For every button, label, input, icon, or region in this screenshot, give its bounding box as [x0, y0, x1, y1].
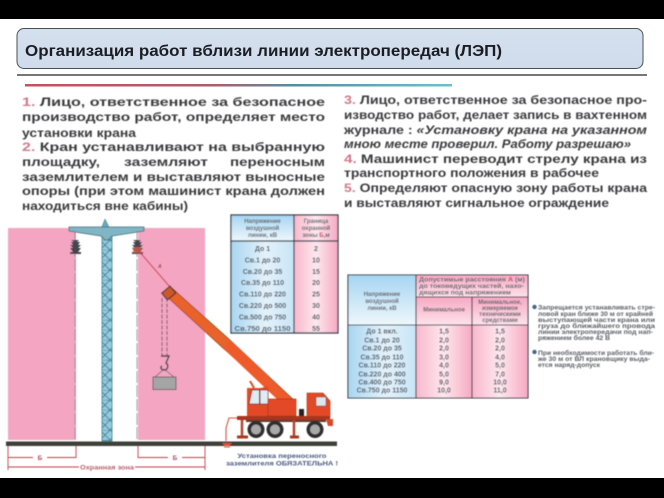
table: protection zone boundaries: Св.35 до 110 — [241, 280, 284, 287]
table: protection zone boundaries: линии, кВ — [248, 233, 278, 239]
title banner — [17, 28, 643, 68]
protection zone: left — [8, 228, 76, 440]
table: permissible distances: До 1 вкл. — [366, 328, 398, 336]
text block: steps 3-5 — [343, 95, 648, 210]
table: permissible distances — [348, 275, 528, 398]
hoist cables and hook — [155, 298, 174, 377]
table: permissible distances: 5,0 — [439, 372, 449, 378]
table: permissible distances: измеряемое — [482, 306, 519, 312]
table: permissible distances: 1,5 — [495, 328, 505, 336]
table: permissible distances: Св.20 до 35 — [362, 346, 402, 352]
protection zone dimension: Охранная зона — [80, 464, 135, 472]
text block: steps 3-5: 3. Лицо, ответственное за безопасное про- — [344, 95, 647, 107]
text block: steps 1-2: находиться вне кабины) — [22, 201, 188, 213]
table: permissible distances: 4,0 — [439, 362, 449, 370]
table: protection zone boundaries: Св.220 до 500 — [239, 303, 286, 310]
bullet note 2 — [532, 349, 654, 369]
text block: steps 1-2: 1. Лицо, ответственное за безопасное — [22, 97, 325, 109]
top black bar — [0, 0, 664, 19]
text block: steps 1-2: переносным — [230, 157, 325, 169]
text block: steps 3-5: транспортного положения в рабочее — [344, 168, 599, 180]
table: protection zone boundaries: 55 — [312, 326, 320, 333]
side notes — [532, 304, 656, 369]
portable grounding conductor — [222, 418, 237, 447]
left conductor — [70, 231, 81, 440]
table: permissible distances: Св.35 до 110 — [360, 354, 404, 362]
text block: steps 3-5: мною месте проверил. Работу разрешаю» — [344, 139, 632, 151]
table: permissible distances: средствами — [482, 318, 518, 324]
bullet note 2: При необходимости работать бли- — [538, 349, 654, 357]
text block: steps 3-5: изводство работ, делает запись в вахтенном — [344, 110, 647, 122]
bullet note 1: Запрещается устанавливать стре- — [538, 304, 655, 312]
bullet note 1: груза до ближайшего провода — [538, 322, 656, 330]
text block: steps 1-2: площадку, — [22, 157, 100, 169]
table: permissible distances: Минимальное, — [478, 300, 522, 306]
text block: steps 1-2: 2. Кран устанавливают на выбранную — [22, 142, 325, 154]
table: permissible distances: Св.1 до 20 — [364, 338, 400, 344]
table: protection zone boundaries: Св.20 до 35 — [243, 269, 282, 276]
table: permissible distances: 10,0 — [493, 380, 507, 386]
bullet note 1 — [532, 304, 656, 342]
gradient rule — [25, 84, 452, 86]
grounding note: заземлителя ОБЯЗАТЕЛЬНА ! — [226, 460, 338, 468]
grounding note — [226, 453, 338, 468]
table: permissible distances: Минимальное — [423, 308, 466, 314]
table: permissible distances: 2,0 — [439, 338, 449, 344]
table: protection zone boundaries — [231, 215, 338, 333]
grounding note: Установка переносного — [238, 453, 327, 460]
ground — [6, 442, 337, 446]
table: permissible distances: 3,0 — [439, 354, 449, 362]
table: permissible distances: воздушной — [365, 298, 399, 305]
table: permissible distances: 10,0 — [437, 388, 451, 394]
table: protection zone boundaries: 30 — [312, 303, 320, 310]
table: permissible distances: 2,0 — [495, 338, 505, 344]
table: protection zone boundaries: 40 — [312, 314, 320, 322]
table: permissible distances: Допустимые расстояния А (м) — [419, 278, 525, 284]
dimension B right — [138, 446, 205, 470]
table: permissible distances: 2,0 — [495, 346, 505, 352]
table: protection zone boundaries: Св.500 до 750 — [239, 314, 286, 322]
bullet note 1: выступающей части крана или — [538, 316, 655, 324]
dimension B left — [8, 446, 76, 470]
wheels — [248, 421, 324, 438]
dimension B left: Б — [38, 455, 43, 462]
crane truck — [237, 381, 333, 438]
table: permissible distances: Св.400 до 750 — [358, 380, 406, 386]
table: protection zone boundaries: Св.110 до 220 — [239, 292, 286, 298]
table: permissible distances: 9,0 — [439, 380, 449, 386]
title underline — [17, 74, 647, 76]
text block: steps 3-5: и выставляют сигнальное ограждение — [344, 198, 609, 210]
dimension B right: Б — [173, 455, 178, 462]
table: protection zone boundaries: Св.1 до 20 — [245, 258, 280, 264]
table: protection zone boundaries: 10 — [312, 258, 320, 264]
bullet note 1: линии электропередачи под нап- — [538, 329, 653, 336]
table: protection zone boundaries: Св.750 до 1150 — [234, 326, 291, 333]
bottom black bar — [0, 478, 664, 498]
text block: steps 1-2: заземлителем и выставляют выносные — [22, 172, 325, 184]
boom — [162, 286, 296, 402]
title banner: Организация работ вблизи линии электропередач (ЛЭП) — [25, 43, 502, 60]
pylon — [69, 219, 144, 441]
distance A line: А — [157, 264, 162, 270]
bullet note 2: ется наряд-допуск — [538, 362, 601, 369]
text block: steps 3-5: журнале : «Установку крана на указанном — [343, 125, 648, 137]
table: permissible distances: 2,0 — [439, 346, 449, 352]
table: permissible distances: техническими — [479, 312, 521, 318]
table: permissible distances: Напряжение — [364, 292, 401, 298]
table: permissible distances: 11,0 — [493, 388, 507, 394]
text block: steps 1-2 — [22, 97, 325, 213]
table: permissible distances: линии, кВ — [367, 306, 397, 312]
table: protection zone boundaries: зоны Б,м — [302, 233, 330, 239]
bullet note 2: же 30 м от ВЛ крановщику выда- — [537, 356, 650, 363]
protection zone: right — [138, 228, 205, 440]
load — [153, 377, 176, 390]
distance A line — [138, 250, 170, 287]
table: protection zone boundaries: Напряжение — [244, 219, 281, 225]
table: protection zone boundaries: Граница — [304, 219, 329, 225]
bullet note 1: ловой кран ближе 30 м от крайней — [538, 310, 653, 318]
table: permissible distances: Св.220 до 400 — [358, 372, 406, 378]
text block: steps 1-2: опоры (при этом машинист крана должен — [22, 186, 325, 198]
table: protection zone boundaries: 25 — [312, 292, 320, 298]
table: protection zone boundaries: 20 — [312, 280, 320, 287]
bullet note 1: ряжением более 42 В — [538, 334, 610, 342]
table: protection zone boundaries: 2 — [314, 246, 318, 253]
text block: steps 1-2: заземляют — [124, 157, 208, 169]
table: permissible distances: 5,0 — [495, 362, 505, 370]
table: permissible distances: 4,0 — [495, 354, 505, 362]
table: permissible distances: Св.110 до 220 — [359, 362, 406, 370]
table: permissible distances: 7,0 — [495, 372, 505, 378]
text block: steps 3-5: 5. Определяют опасную зону работы крана — [344, 183, 648, 195]
table: protection zone boundaries: До 1 — [255, 246, 270, 253]
table: permissible distances: 1,5 — [439, 328, 449, 336]
text block: steps 3-5: 4. Машинист переводит стрелу крана из — [344, 154, 647, 166]
diagram: power line protection zone and crane — [6, 219, 338, 472]
table: permissible distances: до токоведущих частей, нахо- — [419, 283, 524, 290]
right conductor — [132, 231, 143, 440]
table: permissible distances: Св.750 до 1150 — [357, 388, 407, 394]
text block: steps 1-2: производство работ, определяет место — [22, 112, 325, 124]
table: protection zone boundaries: воздушной — [246, 225, 279, 232]
table: permissible distances: дящихся под напряжением — [419, 290, 512, 296]
text block: steps 1-2: установки крана — [22, 128, 137, 140]
table: protection zone boundaries: охранной — [302, 225, 331, 232]
table: protection zone boundaries: 15 — [312, 269, 320, 276]
